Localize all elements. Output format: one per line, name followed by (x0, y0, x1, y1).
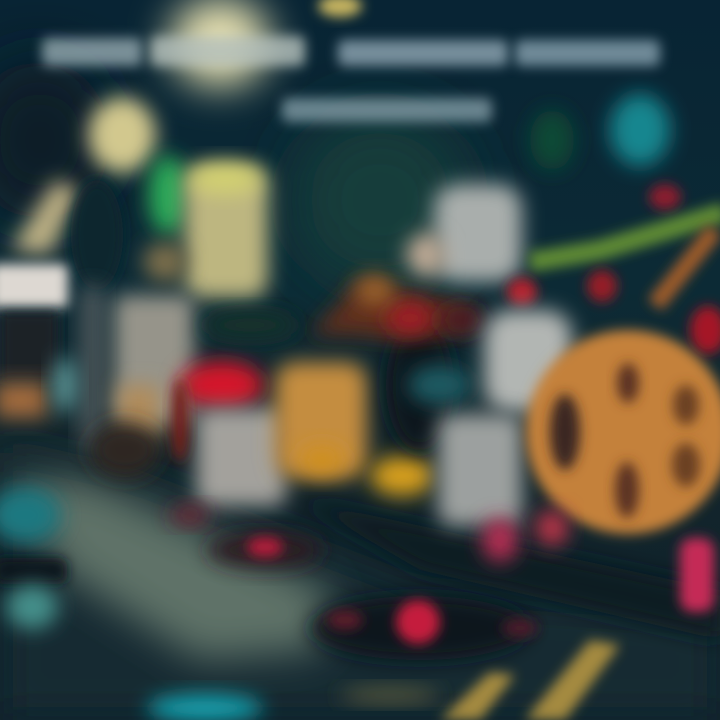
yellow block (370, 456, 434, 496)
figure on left (10, 97, 156, 450)
orange bucket (275, 362, 367, 478)
title: illegible, shown as blurred bars (42, 36, 660, 122)
green and cream box (148, 155, 268, 298)
red and grey box (171, 361, 286, 506)
central dark red branch (202, 274, 486, 451)
cyan reflections (0, 487, 263, 720)
left white box stack (0, 264, 77, 418)
road surface (0, 450, 720, 720)
road reflections (170, 505, 538, 660)
ceiling light (170, 0, 362, 87)
teal and green glows (530, 94, 681, 210)
grey tall box (89, 242, 194, 478)
grey figure (406, 184, 522, 282)
green trend line (507, 212, 720, 354)
bitcoin coin (526, 330, 720, 534)
pink markers (482, 510, 714, 612)
teal and white boxes (408, 310, 572, 526)
